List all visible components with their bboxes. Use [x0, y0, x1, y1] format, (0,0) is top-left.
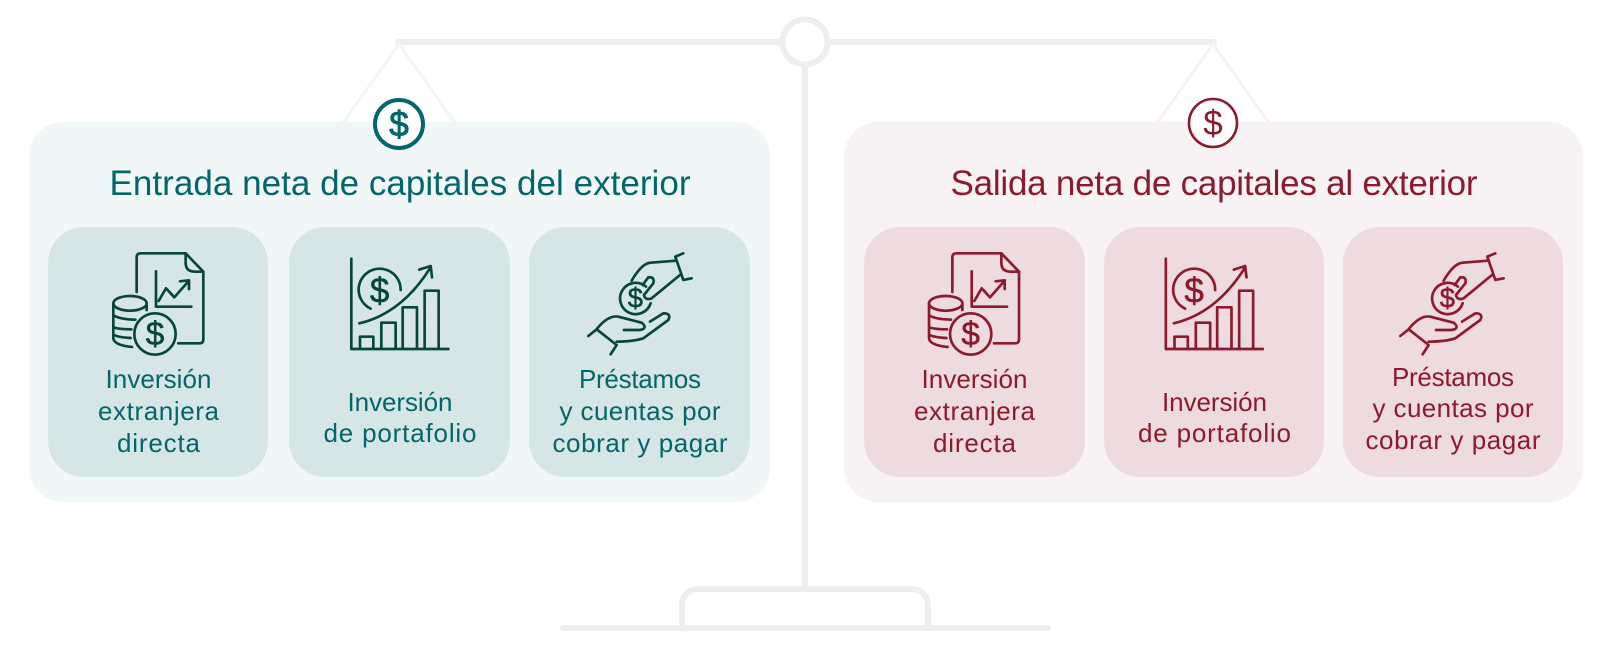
label: directa — [117, 428, 201, 458]
icon: document and coins: $ — [146, 316, 164, 353]
label: y cuentas por — [1372, 393, 1534, 423]
card: inversión extranjera directa — [864, 227, 1085, 477]
label — [1138, 387, 1291, 448]
label — [552, 364, 728, 458]
card: préstamos — [529, 227, 750, 477]
icon: dollar badge: $ — [1203, 104, 1223, 143]
label: Préstamos — [1392, 362, 1514, 392]
icon: dollar badge: $ — [389, 105, 409, 144]
icon: dollar badge — [1189, 99, 1237, 147]
scale frame — [398, 20, 1214, 628]
right pan hanger — [1157, 44, 1269, 123]
icon: bar chart with dollar — [351, 259, 448, 349]
icon: hands and coin — [588, 253, 692, 354]
icon: hands and coin: $ — [628, 282, 643, 313]
label: de portafolio — [324, 418, 476, 448]
label: de portafolio — [1138, 418, 1291, 448]
label — [324, 387, 476, 448]
label: cobrar y pagar — [552, 428, 728, 458]
icon: bar chart with dollar — [1166, 259, 1263, 349]
heading: Salida neta de capitales al exterior — [950, 164, 1478, 203]
card: préstamos — [1343, 227, 1563, 477]
icon: document and coins: $ — [961, 316, 980, 353]
label: y cuentas por — [560, 396, 721, 426]
card: inversión extranjera directa — [48, 227, 268, 477]
icon: document and coins — [929, 253, 1019, 355]
label — [1366, 362, 1541, 455]
label — [98, 364, 220, 458]
icon: hands and coin: $ — [1440, 282, 1455, 313]
label — [914, 364, 1036, 458]
label: Inversión — [106, 364, 212, 394]
icon: dollar badge — [375, 100, 423, 148]
panel: entrada neta — [29, 100, 770, 502]
card: inversión de portafolio — [1104, 227, 1324, 477]
label: directa — [933, 428, 1017, 458]
label: Inversión — [1162, 387, 1267, 417]
panel: salida neta — [844, 99, 1583, 502]
label: Inversión — [348, 387, 452, 417]
icon: hands and coin — [1400, 253, 1504, 354]
icon: bar chart with dollar: $ — [1184, 272, 1204, 311]
icon: document and coins — [113, 253, 203, 355]
label: Inversión — [922, 364, 1028, 394]
label: extranjera — [914, 396, 1036, 426]
card: inversión de portafolio — [289, 227, 510, 477]
heading: Entrada neta de capitales del exterior — [110, 164, 691, 203]
label: cobrar y pagar — [1366, 425, 1541, 455]
icon: bar chart with dollar: $ — [370, 272, 389, 311]
left pan hanger — [343, 44, 455, 123]
label: extranjera — [98, 396, 220, 426]
label: Préstamos — [579, 364, 701, 394]
